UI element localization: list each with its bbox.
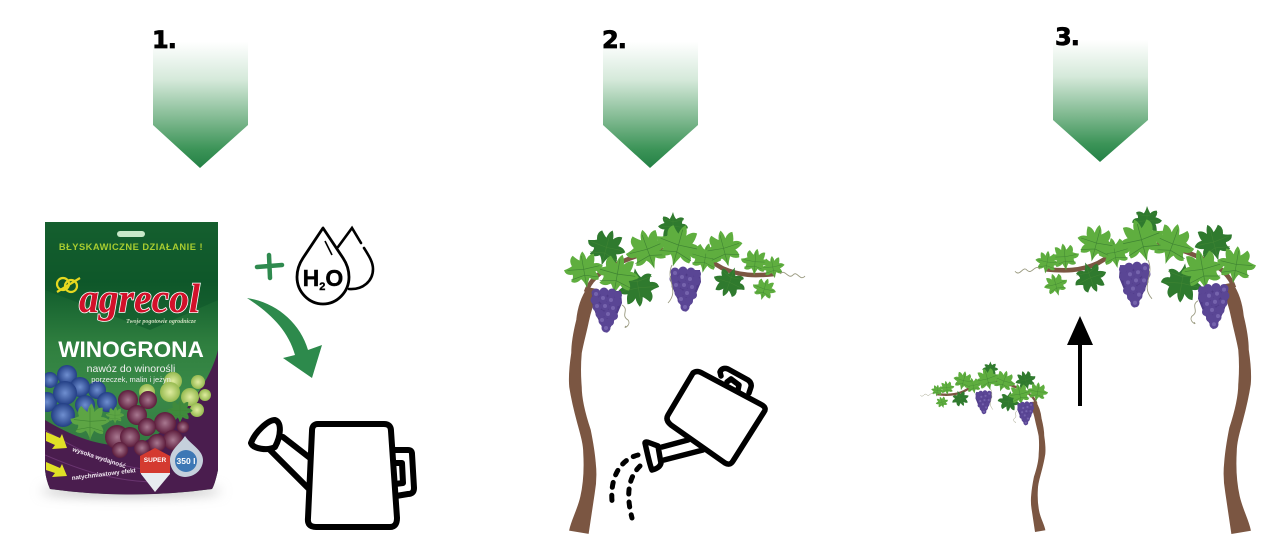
blue grapes — [37, 365, 117, 427]
step number 2: 2. — [602, 26, 626, 54]
hang slot — [117, 231, 145, 237]
product description: nawóz do winorośli — [87, 363, 175, 375]
product name: WINOGRONA — [58, 337, 204, 362]
arrow 1 — [153, 42, 248, 168]
growth arrow — [1067, 316, 1093, 406]
arrow 3 — [1053, 40, 1148, 162]
grape vine step 2 — [561, 212, 805, 533]
grape leaves — [70, 399, 193, 440]
plus sign — [257, 255, 282, 278]
H2O label: O — [325, 265, 343, 291]
young grape vine — [920, 361, 1049, 531]
slogan: BŁYSKAWICZNE DZIAŁANIE ! — [59, 242, 203, 252]
350 l drop badge: 350 l — [177, 456, 195, 466]
super concentrate badge: SUPER — [144, 457, 166, 464]
green curved arrow — [247, 298, 322, 378]
tagline: Twoje pogotowie ogrodnicze — [126, 319, 196, 325]
350 l drop badge — [170, 436, 203, 477]
watering can 2 — [645, 368, 765, 470]
arrow 2 — [603, 42, 698, 168]
yellow arrows — [46, 432, 67, 477]
water stream — [612, 455, 640, 518]
fertilizer pouch — [37, 222, 221, 500]
super concentrate badge — [140, 448, 170, 492]
claim 1: wysoka wydajność — [70, 446, 127, 470]
logo symbol — [57, 278, 80, 292]
step number 1: 1. — [152, 26, 176, 54]
watering can 1 — [251, 420, 414, 527]
grown grape vine step 3 — [1015, 206, 1259, 533]
red grapes — [105, 390, 189, 458]
H2O label: 2 — [319, 281, 325, 293]
H2O label: H — [303, 265, 319, 291]
claim 2: natychmiastowy efekt — [71, 467, 136, 482]
brand name: agrecol — [79, 275, 201, 321]
step number 3: 3. — [1055, 23, 1079, 51]
water drops icon — [297, 228, 373, 304]
product description line 2: porzeczek, malin i jeżyn — [91, 375, 171, 384]
green grapes — [139, 372, 211, 417]
